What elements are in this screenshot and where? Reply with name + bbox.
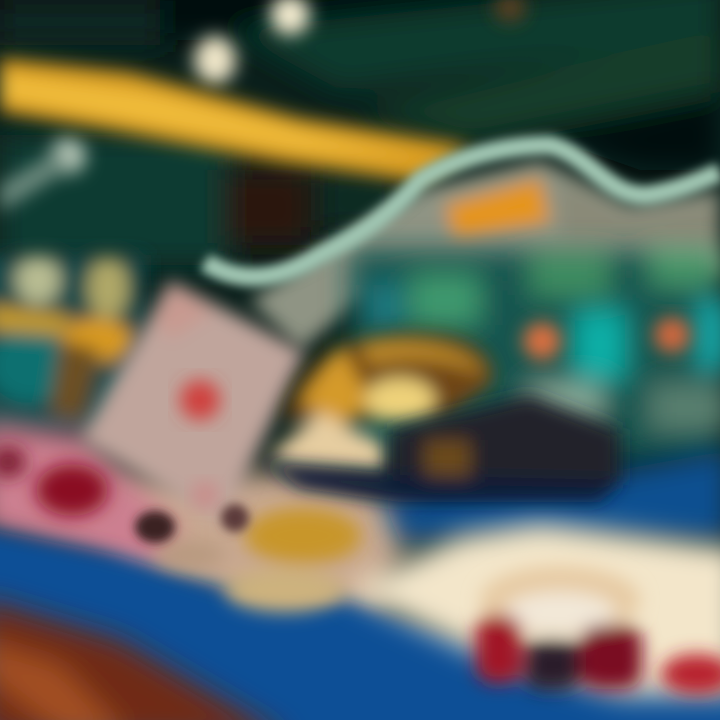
dark small chips (135, 504, 249, 543)
gold bowl (270, 333, 493, 472)
dark boat shape (265, 395, 620, 502)
cream table surface (345, 522, 720, 695)
background: dark green ceiling (0, 0, 720, 462)
card red pip (180, 380, 220, 420)
blue table right edge (380, 450, 720, 540)
mid table backdrop, tan and pink blending (100, 470, 420, 620)
ceiling lights (0, 0, 526, 212)
playing card (80, 280, 305, 525)
gold ceiling band (0, 58, 470, 182)
wavy mint line chart (205, 145, 720, 277)
building wall under wavy line (250, 160, 720, 350)
red chips (0, 446, 108, 516)
blue table (0, 528, 720, 720)
left teal and gold crown (0, 255, 145, 435)
teal casino panels (350, 250, 720, 460)
orange panel dots (523, 317, 690, 360)
red chips foreground (476, 566, 720, 694)
left pink felt (0, 420, 180, 575)
wooden table edge (0, 598, 290, 720)
gold coins stack (155, 508, 361, 612)
